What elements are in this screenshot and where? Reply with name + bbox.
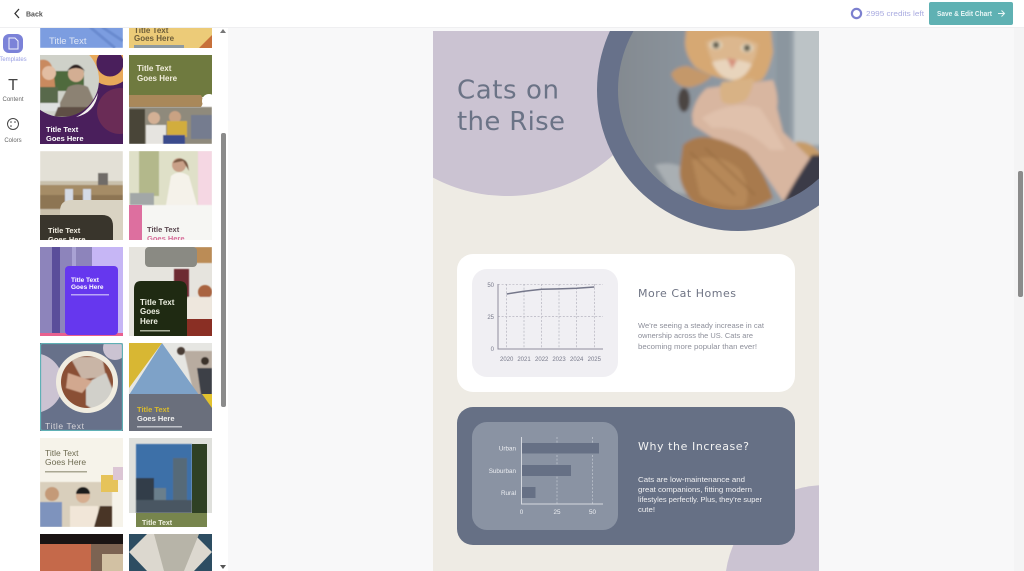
top bar bbox=[0, 0, 1024, 28]
panel: why the increase bbox=[457, 407, 795, 545]
decorative lilac circle bottom bbox=[726, 485, 819, 571]
body text: more cat homes: becoming more popular than ever! bbox=[638, 342, 757, 351]
title: Cats on bbox=[457, 76, 559, 106]
thumbnail: yellow partial: Goes Here bbox=[134, 34, 175, 43]
thumbnail: kitchen: Title Text bbox=[48, 226, 81, 235]
thumbnail: cream team bbox=[40, 438, 123, 527]
bar chart: 25 bbox=[553, 509, 561, 516]
thumbnail: dark green meeting: Goes bbox=[140, 307, 161, 316]
thumbnail: purple students: Title Text bbox=[46, 125, 79, 134]
thumbnail: orange partial bbox=[40, 534, 123, 571]
heading: why the increase: Why the Increase? bbox=[638, 440, 749, 453]
blue photo ring bbox=[597, 31, 819, 231]
thumbnail: city bbox=[129, 438, 212, 527]
line chart: 2022 bbox=[535, 357, 549, 363]
body text: why the increase bbox=[638, 475, 762, 514]
thumbnail: violet bbox=[40, 247, 123, 336]
thumbnail: dark green meeting: Title Text bbox=[140, 298, 175, 307]
thumbnail: dark green meeting bbox=[129, 247, 212, 336]
thumbnail: dark green meeting: Here bbox=[140, 317, 158, 326]
line chart: 2023 bbox=[552, 357, 566, 363]
thumbnail: pink laptop bbox=[129, 151, 212, 243]
thumbnail: kitchen bbox=[40, 151, 123, 244]
bar chart: 50 bbox=[589, 509, 596, 516]
line chart: 2024 bbox=[570, 357, 584, 363]
line chart: 50 bbox=[487, 283, 495, 289]
thumbnail: yellow triangles: Goes Here bbox=[137, 414, 175, 423]
left icon rail and template panel background bbox=[0, 27, 228, 571]
thumbnail: yellow triangles: Title Text bbox=[137, 405, 170, 414]
bar chart: 0 bbox=[520, 509, 524, 516]
thumbnail: blue partial: Title Text bbox=[49, 36, 87, 47]
nav: content: Content bbox=[2, 97, 24, 103]
kitten right paw bbox=[720, 78, 754, 104]
kitten left paw bbox=[671, 66, 712, 87]
right scrollbar bbox=[1014, 28, 1024, 571]
line chart: 0 bbox=[491, 347, 495, 353]
thumbnail: olive team bbox=[129, 55, 212, 144]
nav: content: T bbox=[8, 77, 18, 94]
line chart: 25 bbox=[487, 315, 495, 321]
thumbnail: violet: Goes Here bbox=[71, 284, 104, 291]
thumbnail: cream team: Goes Here bbox=[45, 457, 86, 467]
photo with blue ring bbox=[597, 31, 819, 231]
credits counter bbox=[852, 9, 924, 18]
heading: more cat homes: More Cat Homes bbox=[638, 287, 736, 300]
title: the Rise bbox=[457, 107, 565, 137]
thumbnail: diamond partial bbox=[129, 534, 212, 571]
kitten head bbox=[683, 31, 775, 84]
sleeve bbox=[783, 155, 822, 203]
thumbnail: selected circle hands: Title Text bbox=[45, 421, 85, 431]
credits counter: 2995 credits left bbox=[866, 11, 924, 18]
dark under-paw bbox=[678, 88, 690, 112]
eyes and nose bbox=[710, 40, 722, 50]
photo: kitten held in hand bbox=[618, 31, 819, 210]
thumbnail: pink laptop: Goes Here bbox=[147, 234, 185, 243]
bar chart bbox=[472, 422, 618, 530]
thumbnail: pink laptop: Title Text bbox=[147, 225, 180, 234]
decorative lilac circle top bbox=[433, 31, 665, 196]
save and edit button bbox=[929, 2, 1013, 25]
body text: more cat homes: We're seeing a steady increase in cat bbox=[638, 321, 765, 330]
line chart: 2020 bbox=[500, 357, 514, 363]
bar chart: Suburban bbox=[489, 468, 516, 475]
thumbnail: kitchen: Goes Here bbox=[48, 235, 86, 244]
thumbnail: purple students: Goes Here bbox=[46, 134, 84, 143]
body text: more cat homes: ownership across the US. Cats are bbox=[638, 331, 753, 340]
line chart: 2021 bbox=[517, 357, 531, 363]
thumbnail: yellow partial: Title Text bbox=[134, 26, 169, 35]
thumbnail: purple students bbox=[40, 55, 123, 144]
nav: templates: Templates bbox=[0, 57, 27, 63]
thumbnail: city: Title Text bbox=[142, 520, 173, 527]
thumbnail: olive team: Goes Here bbox=[137, 74, 178, 83]
hand bbox=[692, 80, 810, 201]
body text: more cat homes bbox=[638, 321, 765, 351]
infographic page bbox=[433, 31, 819, 571]
kitten body bbox=[680, 137, 773, 212]
thumbnail: yellow partial bbox=[129, 26, 212, 48]
thumbnail: violet: Title Text bbox=[71, 277, 100, 284]
sidebar nav bbox=[0, 34, 27, 144]
body text: why the increase: great companions, fitting modern bbox=[638, 485, 752, 494]
panel: more cat homes bbox=[457, 254, 795, 392]
nav: content bbox=[2, 77, 24, 103]
back button: Back bbox=[26, 12, 43, 18]
back button bbox=[15, 9, 43, 18]
title bbox=[457, 76, 565, 137]
line chart bbox=[472, 269, 618, 377]
line chart: 2025 bbox=[588, 357, 602, 363]
kitten rear fur bbox=[794, 140, 819, 159]
bar chart: Rural bbox=[501, 490, 516, 497]
nav: colors: Colors bbox=[4, 138, 22, 144]
save and edit button: Save & Edit Chart bbox=[937, 11, 993, 18]
bar chart: Urban bbox=[499, 446, 516, 452]
template thumbnails bbox=[40, 28, 212, 571]
template panel scrollbar bbox=[220, 29, 226, 569]
thumbnail: cream team: Title Text bbox=[45, 448, 79, 458]
body text: why the increase: lifestyles perfectly. Plus, they're super bbox=[638, 495, 762, 504]
thumbnail: selected circle hands bbox=[40, 343, 123, 431]
body text: why the increase: cute! bbox=[638, 505, 655, 514]
thumbnail: olive team: Title Text bbox=[137, 64, 172, 73]
thumbnail: yellow triangles bbox=[129, 343, 212, 431]
body text: why the increase: Cats are low-maintenance and bbox=[638, 475, 745, 484]
thumbnail: blue partial bbox=[40, 28, 123, 48]
